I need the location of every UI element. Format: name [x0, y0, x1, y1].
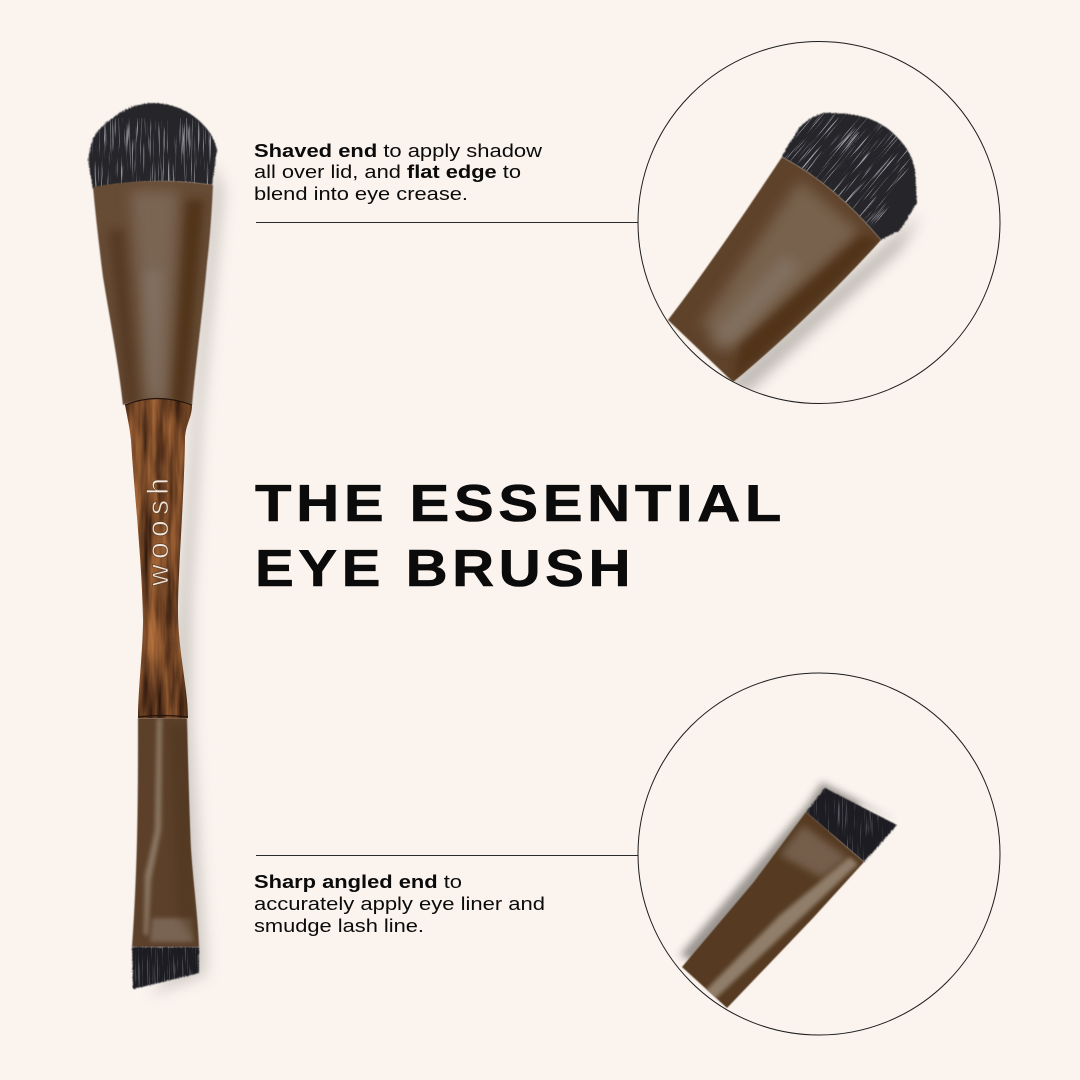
- angled lower bristles: [130, 947, 200, 991]
- detail ferrule: [668, 157, 881, 382]
- detail ferrule: [682, 812, 864, 1008]
- full brush product image: [85, 103, 224, 995]
- brush drop shadow: [150, 160, 224, 995]
- detail bristles: [806, 788, 898, 863]
- detail shadow: [725, 215, 920, 395]
- detail shadow: [680, 782, 895, 965]
- title: THE ESSENTIAL: [255, 475, 786, 533]
- callout: angled end text: Sharp angled end to: [254, 871, 462, 892]
- callout: shaved end text: Shaved end to apply shadow: [254, 140, 543, 161]
- top shaved bristles: [85, 103, 220, 190]
- detail bristles: [782, 112, 918, 241]
- callout: angled end text line 2: accurately apply eye liner and: [254, 893, 545, 914]
- callout: shaved end text line 3: blend into eye crease.: [254, 183, 468, 204]
- lower brown ferrule: [132, 718, 199, 947]
- brand name on handle: woosh: [142, 478, 175, 587]
- leader line to top detail: [256, 222, 639, 224]
- wooden handle: [124, 398, 192, 718]
- top brown ferrule: [93, 181, 213, 405]
- callout: angled end text line 3: smudge lash line.: [254, 915, 424, 936]
- leader line to lower detail: [256, 854, 639, 856]
- detail circle: shaved end: [638, 42, 1000, 404]
- detail circle: angled end: [638, 673, 1000, 1035]
- handle joint lines: [125, 398, 192, 717]
- title line 2: EYE BRUSH: [255, 540, 635, 598]
- callout: shaved end text line 2: all over lid, and flat edge to: [254, 161, 521, 182]
